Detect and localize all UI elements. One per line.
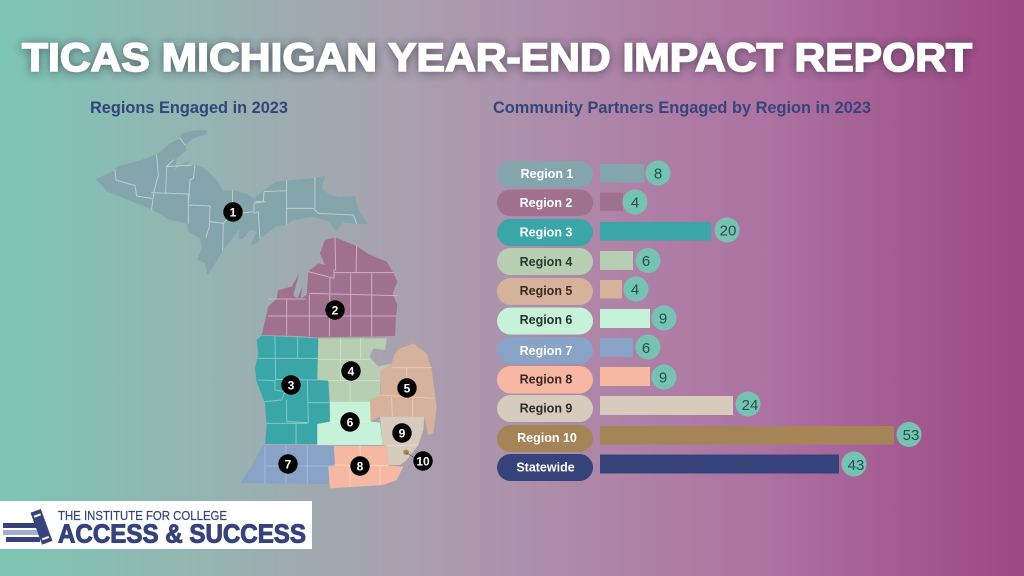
- marker 2: [325, 300, 345, 320]
- marker 8: [350, 456, 370, 476]
- marker 7: 7: [285, 458, 292, 472]
- marker 4: [341, 361, 361, 381]
- row: Region 7: 6: [642, 340, 650, 357]
- marker 1: 1: [230, 206, 237, 220]
- marker 8: 8: [357, 460, 364, 474]
- row: Region 1: 8: [654, 166, 662, 182]
- region 7: [240, 445, 335, 484]
- logo: The Institute for College Access & Success: [0, 501, 312, 549]
- row: Region 10: Region 10: [517, 431, 577, 445]
- marker 1: [223, 202, 243, 222]
- marker 9: 9: [399, 426, 406, 440]
- marker 3: 3: [288, 378, 295, 392]
- row: Region 8: Region 8: [520, 372, 572, 386]
- title: TICAS MICHIGAN YEAR-END IMPACT REPORT: [22, 37, 972, 81]
- marker 5: 5: [404, 382, 411, 396]
- row: Region 6: Region 6: [520, 313, 572, 327]
- marker 3: [281, 375, 301, 395]
- row: Region 8: [497, 364, 676, 394]
- row: Region 5: 4: [631, 282, 639, 298]
- region 1: upper peninsula: [95, 130, 368, 275]
- marker 10: [413, 451, 433, 471]
- row: Region 3: Region 3: [520, 226, 572, 240]
- marker 9: [392, 423, 412, 443]
- bar chart: community partners by region: [497, 160, 922, 481]
- region 5: [370, 343, 437, 435]
- region 10: [403, 449, 409, 455]
- region 9: [380, 417, 424, 465]
- marker 4: 4: [348, 364, 355, 378]
- region 2: northern lower peninsula: [262, 237, 397, 337]
- marker 7: [278, 454, 298, 474]
- row: Region 8: 9: [659, 370, 667, 386]
- logo text line 1: THE INSTITUTE FOR COLLEGE: [58, 509, 227, 523]
- marker 6: 6: [347, 416, 354, 430]
- region 4: [317, 338, 392, 402]
- regions 3 to 10: southern lower peninsula: [240, 336, 437, 488]
- row: Region 7: [497, 334, 660, 364]
- logo text line 2: ACCESS & SUCCESS: [58, 518, 306, 548]
- row: Region 3: [497, 218, 740, 246]
- region 8: [328, 446, 403, 488]
- marker 10: 10: [416, 454, 430, 468]
- row: Region 2: 4: [631, 194, 639, 212]
- row: Region 4: Region 4: [520, 255, 572, 269]
- region 3: [255, 336, 330, 444]
- row: Region 6: 9: [659, 310, 667, 328]
- row: Region 9: [497, 392, 760, 422]
- map of Michigan regions: [95, 130, 437, 488]
- title: TICAS MICHIGAN YEAR-END IMPACT REPORT: [22, 36, 972, 80]
- icon: stack of books: [3, 509, 52, 545]
- row: Region 1: [497, 160, 670, 188]
- marker 2: 2: [332, 304, 339, 318]
- row: Region 4: [497, 248, 660, 275]
- marker 6: [340, 412, 360, 432]
- row: Region 4: 6: [642, 253, 650, 270]
- region 6: [317, 402, 383, 445]
- marker 5: [397, 378, 417, 398]
- row: Region 9: 24: [742, 397, 758, 414]
- row: Region 7: Region 7: [520, 344, 572, 358]
- row: Region 5: Region 5: [520, 284, 572, 298]
- heading: regions map: Regions Engaged in 2023: [90, 98, 288, 117]
- row: Region 10: 53: [903, 427, 919, 444]
- row: Region 2: Region 2: [520, 196, 572, 210]
- row: Statewide: 43: [848, 457, 864, 474]
- row: Region 6: [497, 306, 676, 334]
- heading: bar chart: Community Partners Engaged by Region in 2023: [493, 98, 871, 117]
- row: Statewide: Statewide: [516, 460, 575, 474]
- row: Region 9: Region 9: [520, 402, 572, 416]
- row: Region 3: 20: [720, 222, 736, 240]
- row: Statewide: [497, 452, 866, 481]
- row: Region 10: [497, 422, 922, 452]
- row: Region 1: Region 1: [521, 167, 573, 181]
- row: Region 2: [497, 190, 648, 216]
- row: Region 5: [497, 276, 648, 305]
